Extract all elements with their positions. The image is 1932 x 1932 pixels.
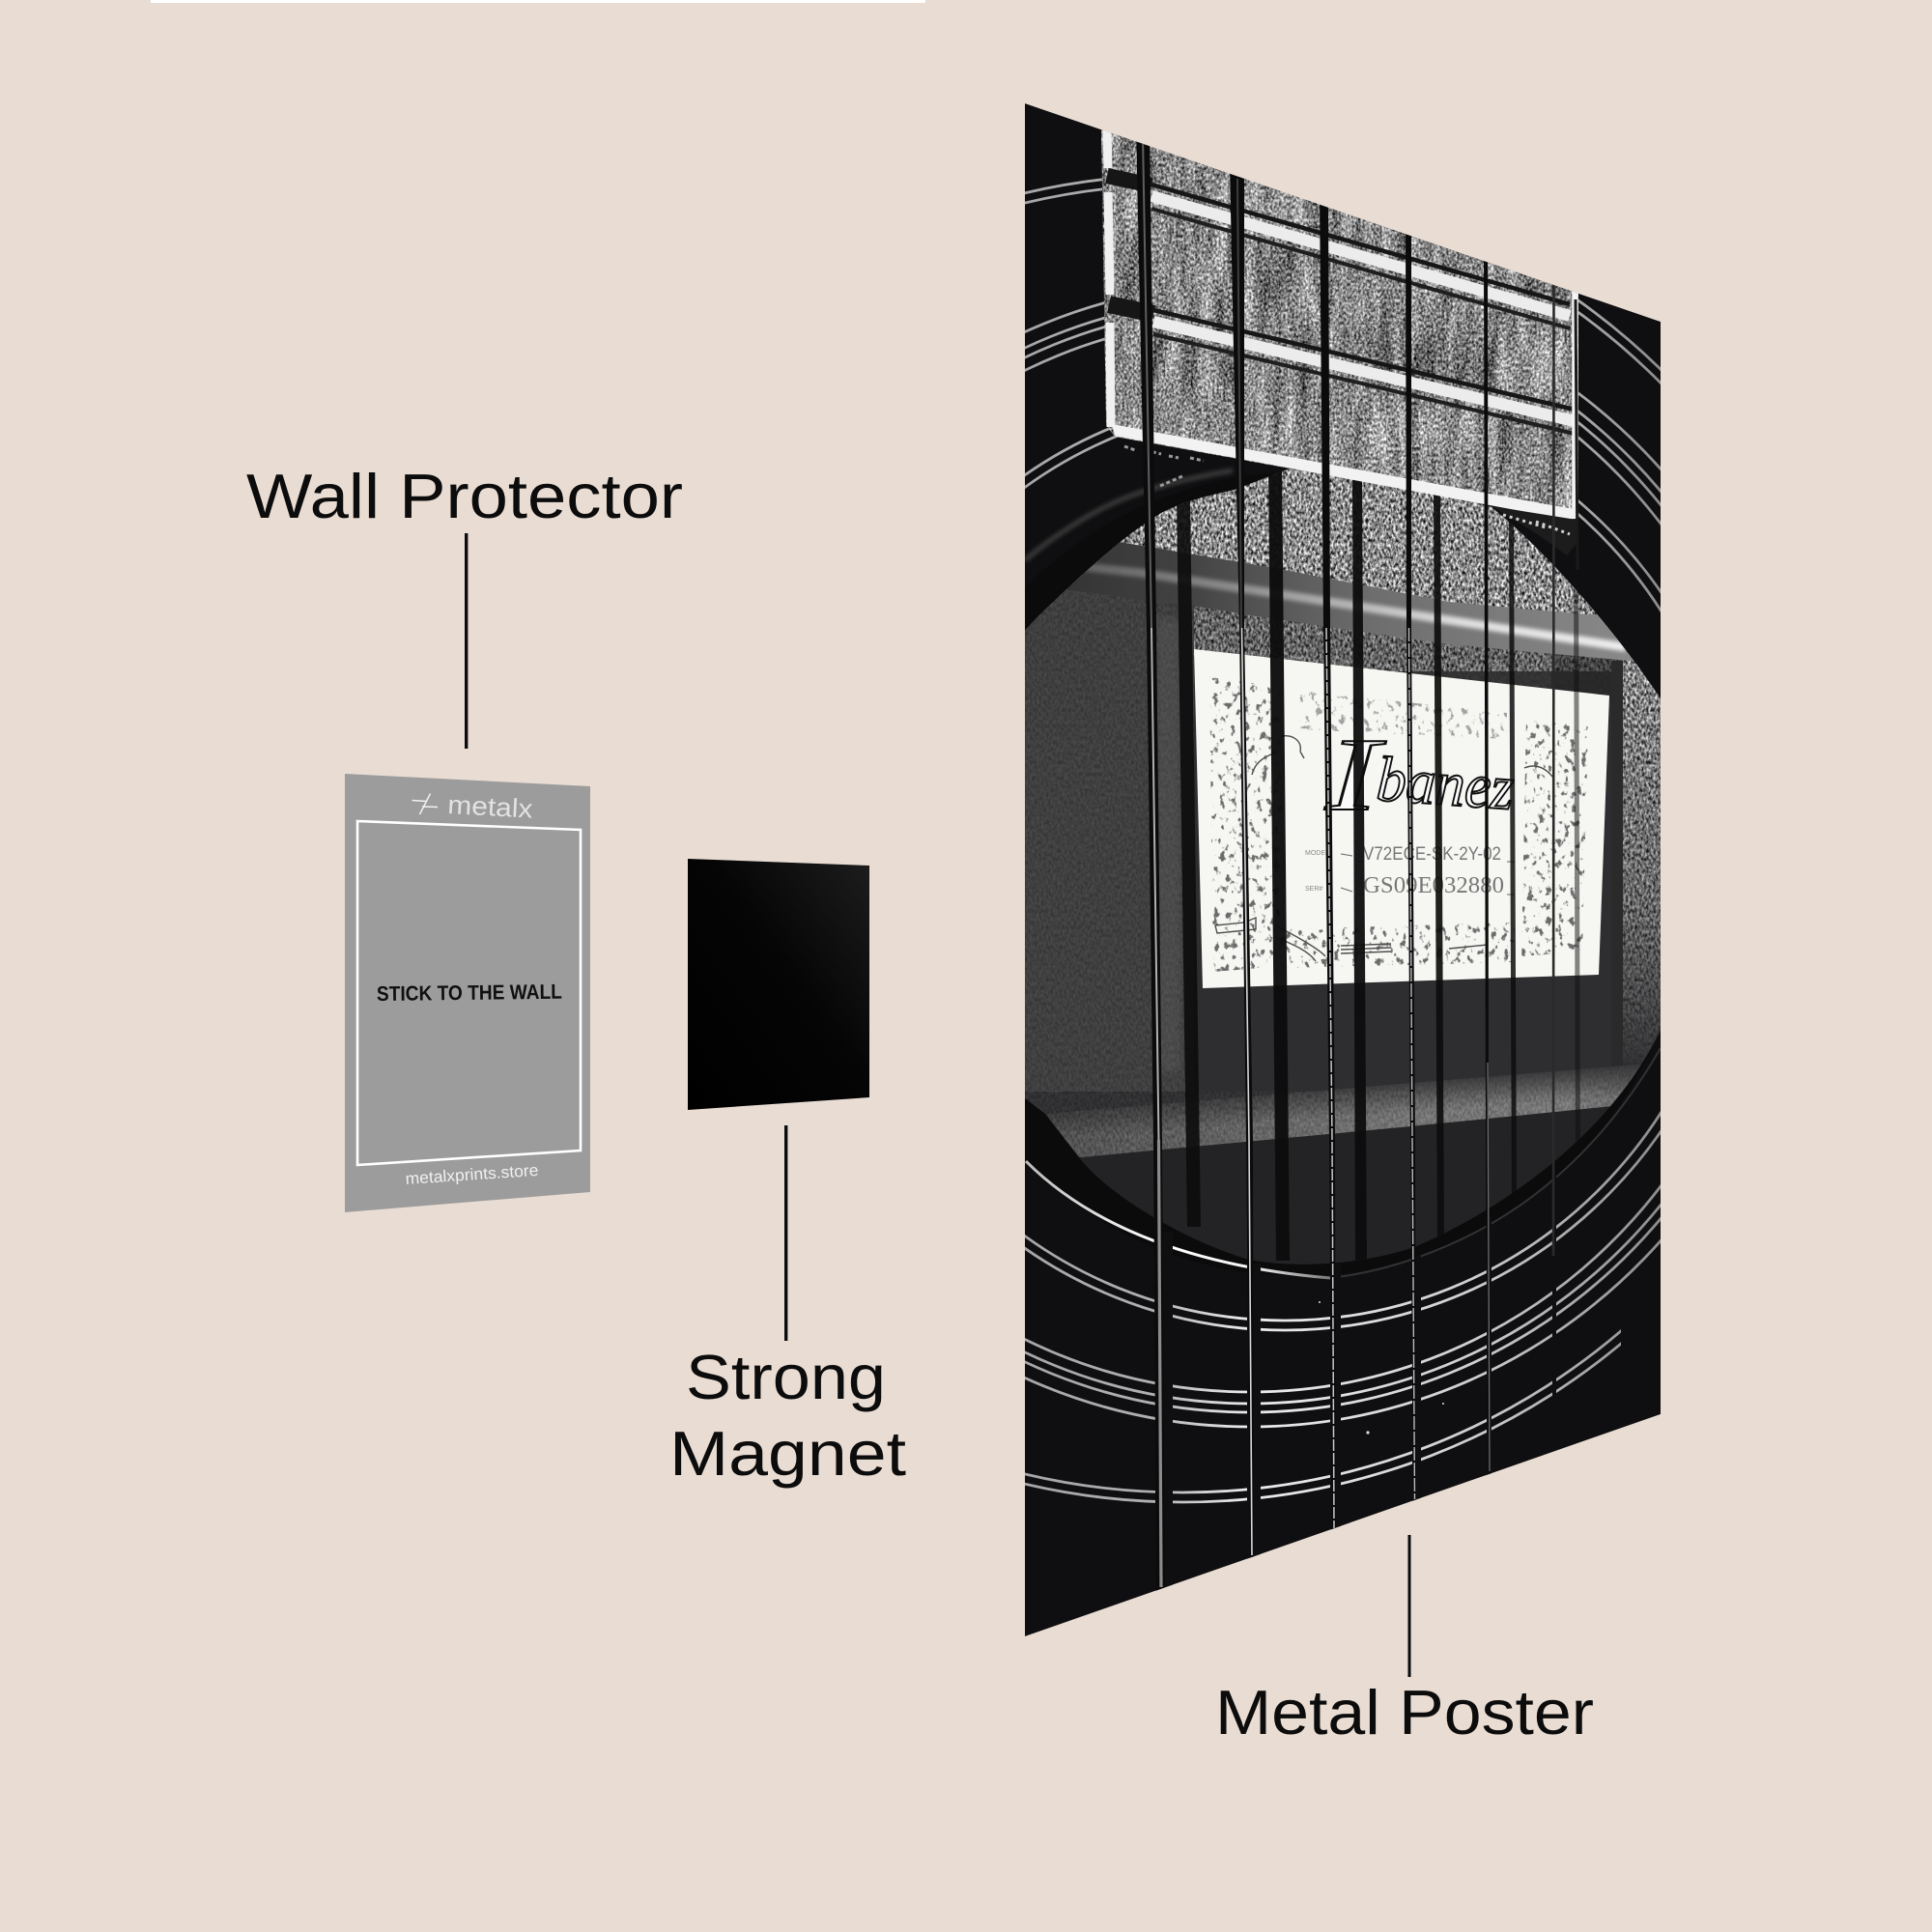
lighter column left panel	[1155, 618, 1180, 1072]
panel: metal poster guitar photo	[1025, 103, 1661, 1636]
panel: wall protector sheet	[345, 774, 590, 1212]
second line: Magnet	[669, 1418, 906, 1489]
instruction text: STICK TO THE WALL	[377, 980, 562, 1006]
fingerboard	[1101, 116, 1584, 555]
first line: Strong	[686, 1342, 886, 1412]
brace highlight	[1086, 567, 1626, 647]
board under speckles	[1124, 446, 1204, 486]
dark panel around label	[1194, 657, 1661, 1092]
board wood	[1101, 116, 1584, 522]
board bottom edge	[1112, 424, 1577, 520]
label serial text: GS09E032880	[1363, 873, 1504, 898]
label sheet	[1194, 649, 1609, 988]
sheet body	[345, 774, 590, 1212]
light strip on the back	[1045, 1065, 1640, 1157]
board left edge	[1107, 129, 1111, 427]
ornament: right column	[1521, 720, 1588, 956]
logo word: banez	[1375, 744, 1517, 824]
leader line: wall protector	[465, 533, 468, 749]
string 1	[1136, 126, 1165, 1594]
label model text: V72ECE-SK-2Y-02	[1363, 844, 1501, 865]
string gaps in rings	[1155, 1174, 1556, 1637]
heading: Metal Poster: Metal Poster	[1215, 1677, 1594, 1747]
string shadows	[1177, 464, 1580, 1265]
board right edge	[1572, 292, 1578, 518]
fret two	[1109, 304, 1575, 434]
mottling on left panel	[1025, 580, 1194, 1092]
floor below strip	[1080, 1107, 1609, 1264]
label field captions: SER#	[1305, 886, 1322, 893]
fret one	[1107, 176, 1570, 328]
interior base	[1025, 469, 1646, 1158]
label logo: Ibanez	[1323, 740, 1515, 810]
ornament: bottom scroll	[1285, 923, 1515, 968]
website text: metalxprints.store	[405, 1161, 539, 1188]
textured right strip	[1623, 657, 1663, 1063]
panel: strong magnet	[688, 859, 869, 1110]
label field rules	[1341, 854, 1515, 895]
icon: metalx logo mark	[412, 794, 438, 814]
ornament: line work	[1215, 736, 1553, 961]
string 2	[1230, 164, 1254, 1557]
lower dim rim	[1330, 1048, 1661, 1278]
back wood texture above brace	[1025, 469, 1642, 671]
label	[1194, 649, 1609, 988]
leader line: magnet	[784, 1125, 787, 1341]
dark panel left of label	[1025, 580, 1194, 1092]
soft rim highlight	[1025, 470, 1233, 560]
brand wordmark: metalx	[447, 790, 534, 824]
rosette rings	[1025, 178, 1661, 1503]
string 7	[1576, 299, 1577, 570]
label field captions: MODEL	[1305, 850, 1329, 857]
string 4	[1406, 222, 1416, 1501]
strings	[1136, 126, 1577, 1594]
board end speckles	[1503, 515, 1570, 534]
string 5	[1484, 253, 1491, 1473]
sound hole rim	[908, 472, 1690, 1276]
middle ring set	[1025, 301, 1661, 1428]
top white strip	[151, 0, 925, 3]
heading: Wall Protector: Wall Protector	[246, 461, 683, 531]
label field captions	[1305, 850, 1326, 891]
sound hole interior	[1025, 425, 1663, 1275]
ornament: left column	[1209, 676, 1273, 972]
ornament: top scroll	[1299, 691, 1507, 739]
heading: Strong Magnet	[669, 1342, 906, 1489]
bright rim highlight	[1026, 1161, 1330, 1278]
label ornaments	[1209, 676, 1588, 972]
outer ring pair	[1025, 178, 1661, 1503]
leader line: metal poster	[1408, 1535, 1410, 1677]
surface specks	[1319, 1301, 1444, 1435]
cross brace	[1066, 542, 1634, 661]
white frame	[357, 821, 581, 1165]
string 3	[1320, 193, 1336, 1531]
interior mottling	[1025, 671, 1551, 1157]
shade over wood below brace	[1194, 607, 1623, 704]
wood shade right of label top	[1551, 653, 1640, 703]
board end shadow blob	[1492, 506, 1578, 555]
dark strip right of label	[1611, 661, 1623, 705]
poster base	[1025, 103, 1661, 1636]
logo initial: I	[1323, 718, 1387, 833]
string 6	[1552, 280, 1555, 1256]
inner ring pair	[1025, 427, 1661, 1331]
